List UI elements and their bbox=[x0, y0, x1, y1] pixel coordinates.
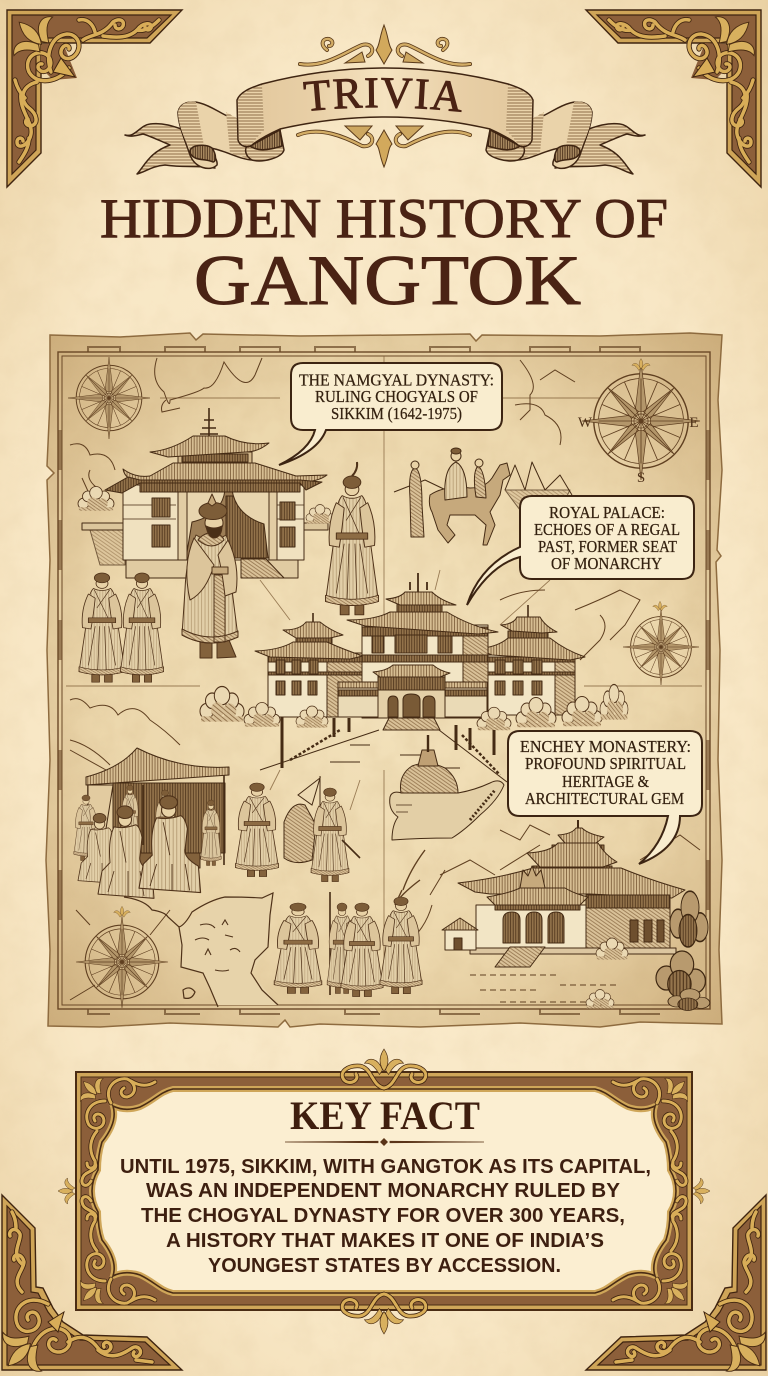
callout: Royal Palace: ROYAL PALACE: bbox=[549, 503, 665, 522]
callout: Namgyal dynasty bbox=[279, 363, 502, 465]
banner ornament: top scrollwork bbox=[300, 25, 470, 65]
map grid lines bbox=[66, 356, 702, 960]
illustration: horsemen and hill town bbox=[394, 448, 572, 545]
callout: Namgyal dynasty: THE NAMGYAL DYNASTY: bbox=[299, 370, 494, 390]
compass: top left bbox=[68, 357, 150, 439]
illustration: monastery foliage bbox=[470, 891, 710, 1010]
compass: top right bbox=[578, 359, 700, 486]
callout: Royal Palace bbox=[467, 496, 694, 605]
figure: attendant left bbox=[79, 573, 125, 682]
map frame bbox=[58, 347, 710, 1014]
illustration: central royal palace bbox=[255, 573, 585, 730]
callout: Enchey monastery bbox=[508, 731, 702, 864]
key fact scrollwork bbox=[58, 1049, 710, 1334]
corner ornament: bottom right bbox=[586, 1195, 768, 1376]
key fact frame bbox=[75, 1071, 693, 1311]
key fact text panel bbox=[92, 1089, 676, 1293]
callout: Royal Palace: OF MONARCHY bbox=[551, 554, 662, 573]
banner ribbon bbox=[125, 68, 645, 174]
compass: top right: W bbox=[578, 415, 593, 431]
banner label: TRIVIA bbox=[303, 78, 462, 112]
title line one: HIDDEN HISTORY OF bbox=[100, 188, 668, 250]
illustration: palace gardens bbox=[200, 684, 628, 730]
compass: right middle bbox=[623, 601, 699, 685]
map paper bbox=[40, 325, 730, 1035]
callout: Enchey monastery: PROFOUND SPIRITUAL bbox=[525, 754, 686, 773]
illustration: bushes behind pagoda bbox=[78, 486, 334, 523]
right tower bbox=[477, 605, 585, 715]
figures: seated court bbox=[74, 785, 221, 898]
callout: Namgyal dynasty: SIKKIM (1642-1975) bbox=[331, 404, 462, 423]
key fact body text: UNTIL 1975, SIKKIM, WITH GANGTOK AS ITS CAPITAL, bbox=[120, 1156, 651, 1178]
key fact panel edge bbox=[92, 1089, 676, 1293]
compass: top right: E bbox=[689, 415, 699, 431]
figure: standing noble bbox=[326, 462, 378, 615]
compass: top right: S bbox=[637, 470, 645, 486]
callout: Royal Palace: ECHOES OF A REGAL bbox=[534, 520, 680, 539]
figure: king in doorway bbox=[182, 494, 238, 658]
center tower bbox=[347, 573, 498, 718]
callout: Enchey monastery: HERITAGE & bbox=[562, 772, 649, 791]
panel: parchment map bbox=[40, 325, 730, 1035]
key fact divider bbox=[285, 1138, 484, 1146]
figure: attendant right bbox=[120, 573, 164, 682]
illustration: Enchey monastery bbox=[442, 820, 685, 967]
key fact body text: YOUNGEST STATES BY ACCESSION. bbox=[208, 1255, 561, 1277]
porch and steps bbox=[338, 665, 487, 730]
illustration: stupa on map fragment bbox=[390, 735, 504, 840]
illustration: royal tent scene bbox=[86, 748, 229, 868]
callout: Namgyal dynasty: RULING CHOGYALS OF bbox=[315, 387, 478, 406]
map coastline sketches bbox=[70, 358, 700, 1000]
title line two: GANGTOK bbox=[194, 242, 581, 320]
illustration: palace road and gate posts bbox=[260, 717, 507, 782]
banner ornament: bottom scrollwork bbox=[298, 126, 470, 167]
figures: diplomatic meeting bbox=[274, 892, 422, 997]
callout: Royal Palace: PAST, FORMER SEAT bbox=[538, 537, 678, 556]
compass: bottom left bbox=[76, 906, 168, 1008]
ribbon left tail bbox=[125, 101, 284, 174]
key fact heading: KEY FACT bbox=[290, 1093, 480, 1138]
left tower bbox=[255, 613, 363, 717]
callout: Enchey monastery: ENCHEY MONASTERY: bbox=[520, 737, 691, 756]
illustration: top-left pagoda palace bbox=[82, 408, 328, 578]
corner ornament: top left bbox=[0, 3, 182, 187]
illustration: region map bbox=[124, 893, 278, 1007]
corner ornament: top right bbox=[586, 3, 768, 187]
panel: key fact bbox=[58, 1049, 710, 1334]
figure: swordsman bbox=[311, 788, 360, 882]
corner ornament: bottom left bbox=[0, 1195, 182, 1376]
figure: walking courtier bbox=[235, 783, 279, 877]
illustration: rock with banner bbox=[284, 776, 320, 863]
key fact body text: THE CHOGYAL DYNASTY FOR OVER 300 YEARS, bbox=[141, 1205, 625, 1227]
callout: Enchey monastery: ARCHITECTURAL GEM bbox=[525, 789, 684, 808]
key fact body text: WAS AN INDEPENDENT MONARCHY RULED BY bbox=[146, 1180, 621, 1202]
key fact body text: A HISTORY THAT MAKES IT ONE OF INDIA’S bbox=[166, 1230, 604, 1252]
key fact body text bbox=[120, 1156, 651, 1277]
